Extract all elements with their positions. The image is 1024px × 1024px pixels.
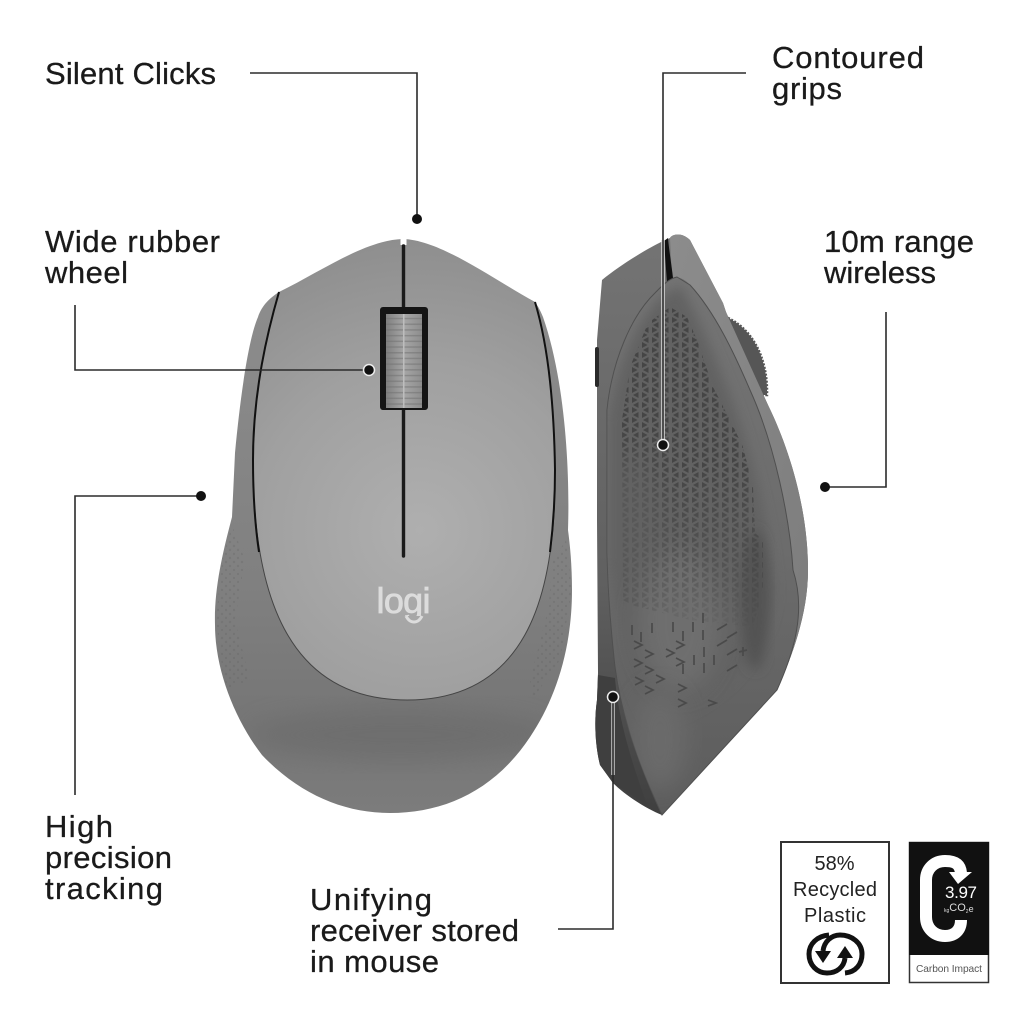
textured grip panel <box>607 277 799 815</box>
receiver door <box>595 675 647 805</box>
callout: silent clicks <box>45 56 422 224</box>
carbon unit: e <box>969 904 974 914</box>
black panel <box>909 842 989 955</box>
side button bump <box>595 347 599 387</box>
label second line: grips <box>772 71 842 106</box>
leader line <box>75 496 201 795</box>
triangle grip pattern <box>622 307 763 627</box>
logi logo: logi <box>376 580 430 621</box>
badge frame <box>910 842 988 982</box>
leader line <box>558 697 613 929</box>
carbon unit: CO <box>949 902 966 914</box>
leader halo <box>661 240 665 445</box>
badge text: Recycled <box>793 879 877 901</box>
label: Silent Clicks <box>45 56 216 91</box>
callout: 10m range wireless <box>820 224 974 492</box>
marker dot <box>196 491 206 501</box>
label third line: in mouse <box>310 944 439 979</box>
leader line <box>663 73 746 445</box>
marker dot <box>412 214 422 224</box>
carbon unit: 2 <box>966 909 969 915</box>
mouse body outer shell <box>215 238 572 813</box>
marker dot <box>364 364 374 376</box>
top shell with buttons <box>253 239 555 700</box>
label: Unifying <box>310 882 432 917</box>
label third line: tracking <box>45 871 163 906</box>
callout: unifying receiver <box>310 692 618 979</box>
leader line <box>825 312 886 487</box>
top notch <box>400 236 406 245</box>
callout: wide rubber wheel <box>44 224 374 376</box>
centre button split <box>402 246 405 556</box>
carbon value: 3.97 <box>945 883 977 902</box>
badge: carbon impact <box>909 842 989 982</box>
upper shell strip <box>670 234 808 690</box>
badge text: 58% <box>814 853 855 875</box>
leader halo <box>611 697 615 775</box>
badge caption: Carbon Impact <box>916 964 982 975</box>
label: 10m range <box>824 224 974 259</box>
sparse lower grip marks <box>632 613 747 707</box>
marker dot <box>658 440 668 450</box>
label: Contoured <box>772 40 924 75</box>
badge text <box>793 853 877 927</box>
label second line: receiver stored <box>310 913 519 948</box>
marker dot <box>820 482 830 492</box>
badge text: Plastic <box>804 905 866 927</box>
callout: contoured grips <box>658 40 924 450</box>
label: Wide rubber <box>45 224 220 259</box>
shell seam lines <box>253 292 555 700</box>
marker dot <box>608 692 618 702</box>
carbon unit: kg <box>944 908 949 914</box>
leader line <box>75 305 369 370</box>
shell gap <box>664 238 673 283</box>
label second line: wireless <box>823 255 936 290</box>
scroll wheel profile <box>726 318 767 395</box>
callout: high precision tracking <box>45 491 206 906</box>
badge frame <box>781 842 889 983</box>
leader line <box>250 73 417 219</box>
icon: carbon cycle arrow <box>926 861 972 936</box>
body shading and side grip dots <box>216 525 572 759</box>
mouse: top view <box>215 236 572 813</box>
side silhouette <box>595 234 808 815</box>
label: High <box>45 809 113 844</box>
label second line: wheel <box>44 255 128 290</box>
label second line: precision <box>45 840 172 875</box>
icon: recycling loops <box>809 935 862 973</box>
mouse: side view <box>595 234 808 815</box>
badge: recycled plastic <box>781 842 889 983</box>
scroll wheel <box>380 307 428 410</box>
